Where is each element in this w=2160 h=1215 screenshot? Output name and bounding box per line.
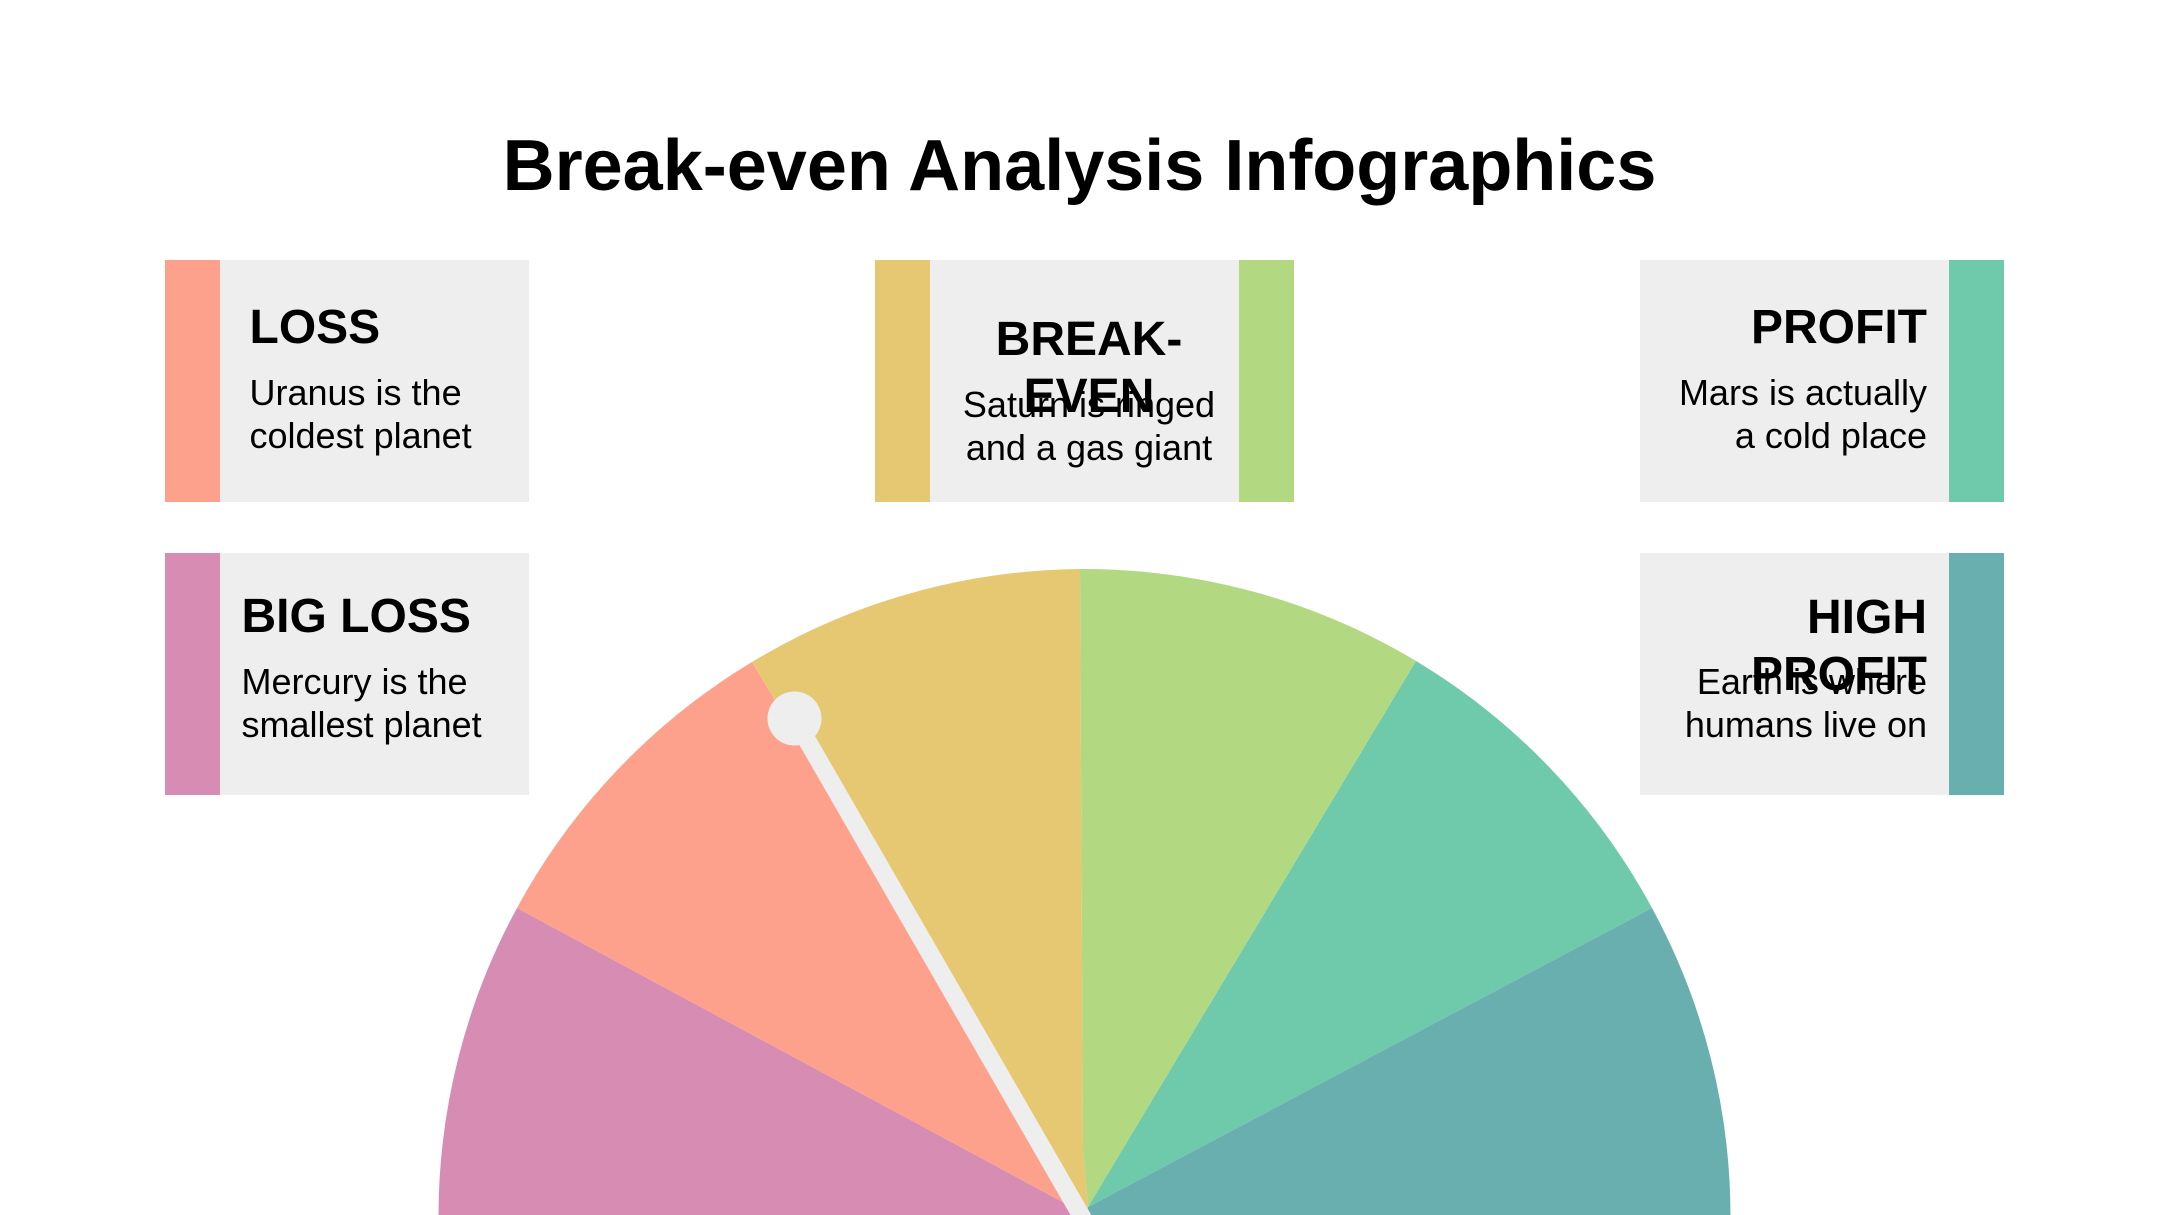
text: high profit description: Earth is where (1697, 661, 1927, 702)
text: big loss description: Mercury is the (242, 661, 468, 702)
text: loss description: Uranus is the (250, 372, 462, 413)
heading: break-even: BREAK- (996, 313, 1182, 366)
gauge chart (438, 569, 1731, 1215)
heading: loss: LOSS (250, 301, 380, 354)
gauge segment: profit (1088, 661, 1652, 1207)
heading: high profit: HIGH (1807, 591, 1927, 644)
title: Break-even Analysis Infographics (503, 126, 1656, 206)
gauge segment: break-even low (752, 569, 1088, 1214)
gauge segment: high profit (1085, 908, 1731, 1215)
colour tab: big loss (165, 553, 220, 795)
colour tab: high profit (1949, 553, 2004, 795)
text: profit description: a cold place (1735, 415, 1927, 456)
gauge needle (768, 692, 1093, 1215)
text: break-even description: Saturn is ringed (963, 384, 1215, 425)
text: high profit description: humans live on (1685, 704, 1927, 745)
panel: high profit (1640, 553, 2004, 795)
panel: profit (1640, 260, 2004, 502)
text: big loss description: smallest planet (242, 704, 482, 745)
panel: break-even (875, 260, 1294, 502)
text: break-even description: and a gas giant (966, 427, 1212, 468)
colour tab: break-even left (875, 260, 930, 502)
colour tab: profit (1949, 260, 2004, 502)
gauge segment: break-even high (1080, 569, 1416, 1207)
panel: loss (165, 260, 529, 502)
text: profit description: Mars is actually (1679, 372, 1927, 413)
heading: high profit: PROFIT (1751, 648, 1927, 701)
colour tab: loss (165, 260, 220, 502)
panel: big loss (165, 553, 529, 795)
heading: big loss: BIG LOSS (242, 590, 471, 643)
gauge segment: big loss (438, 908, 1095, 1215)
colour tab: break-even right (1239, 260, 1294, 502)
heading: profit: PROFIT (1751, 301, 1927, 354)
heading: break-even: EVEN (1024, 370, 1154, 423)
text: loss description: coldest planet (250, 415, 472, 456)
gauge segment: loss (517, 662, 1085, 1214)
